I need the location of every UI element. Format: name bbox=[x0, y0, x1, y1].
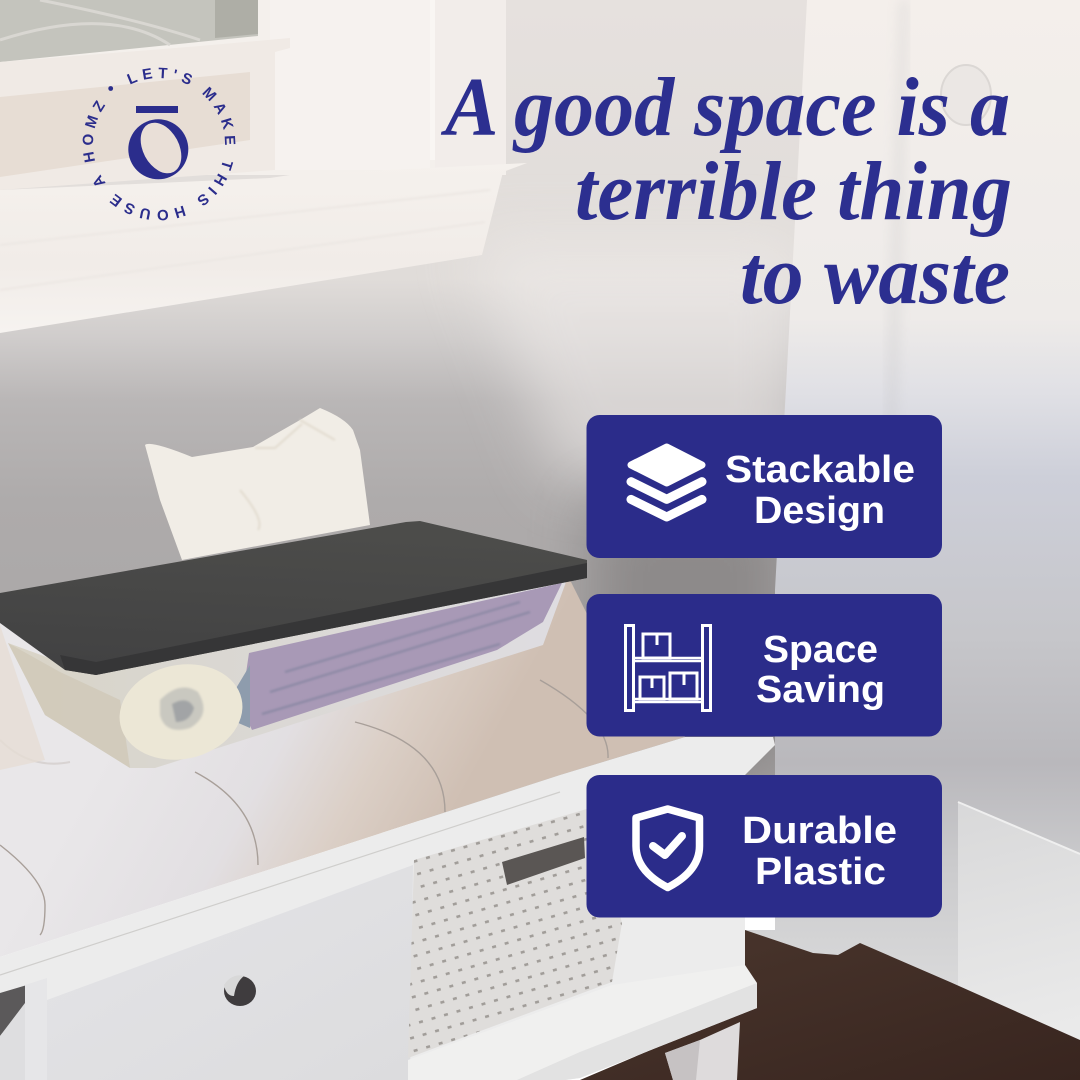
panel: stackable design bbox=[586, 415, 942, 558]
title: terrible thing bbox=[575, 145, 1012, 238]
clear box body bbox=[8, 572, 587, 768]
icon: stacked layers bbox=[631, 447, 702, 517]
label: Design bbox=[754, 490, 885, 532]
label: Stackable bbox=[725, 449, 915, 491]
label: Plastic bbox=[755, 851, 886, 893]
drawer knob bbox=[224, 975, 256, 1006]
logo macron bbox=[136, 106, 178, 113]
open shelf and leg bbox=[408, 965, 757, 1080]
panel: durable plastic bbox=[586, 775, 942, 918]
bench leg bbox=[665, 1022, 740, 1080]
window with planter bbox=[0, 0, 506, 190]
storage box bbox=[0, 521, 587, 771]
label: Durable bbox=[742, 810, 897, 852]
floor bbox=[580, 930, 1080, 1080]
window sill bbox=[0, 163, 527, 333]
logo: circular badge bbox=[82, 68, 236, 220]
label bbox=[756, 629, 885, 711]
icon: shelving with boxes bbox=[626, 626, 710, 710]
label: Space bbox=[763, 629, 878, 671]
panel: space saving bbox=[586, 594, 942, 736]
title: to waste bbox=[740, 229, 1010, 322]
logo o bbox=[128, 116, 190, 180]
badge dot bbox=[108, 86, 113, 91]
circular tagline: LET'S MAKE THIS HOUSE A HOMZ bbox=[82, 68, 236, 220]
purple blanket bbox=[232, 583, 562, 730]
door knob bbox=[941, 65, 991, 125]
bench cushion bbox=[0, 580, 685, 957]
title bbox=[440, 61, 1012, 322]
label bbox=[742, 810, 897, 893]
bench frame bbox=[0, 737, 775, 1080]
rolled towel bbox=[111, 653, 251, 771]
woven basket bbox=[408, 808, 622, 1058]
title: A good space is a bbox=[440, 61, 1010, 154]
dark lid bbox=[0, 521, 587, 675]
pillow bbox=[145, 408, 370, 560]
icon: shield with check bbox=[636, 809, 700, 888]
label bbox=[725, 449, 915, 532]
label: Saving bbox=[756, 669, 885, 711]
door and frame bbox=[740, 0, 1080, 1080]
wall bbox=[0, 0, 810, 820]
drawer with knob bbox=[47, 865, 413, 1080]
